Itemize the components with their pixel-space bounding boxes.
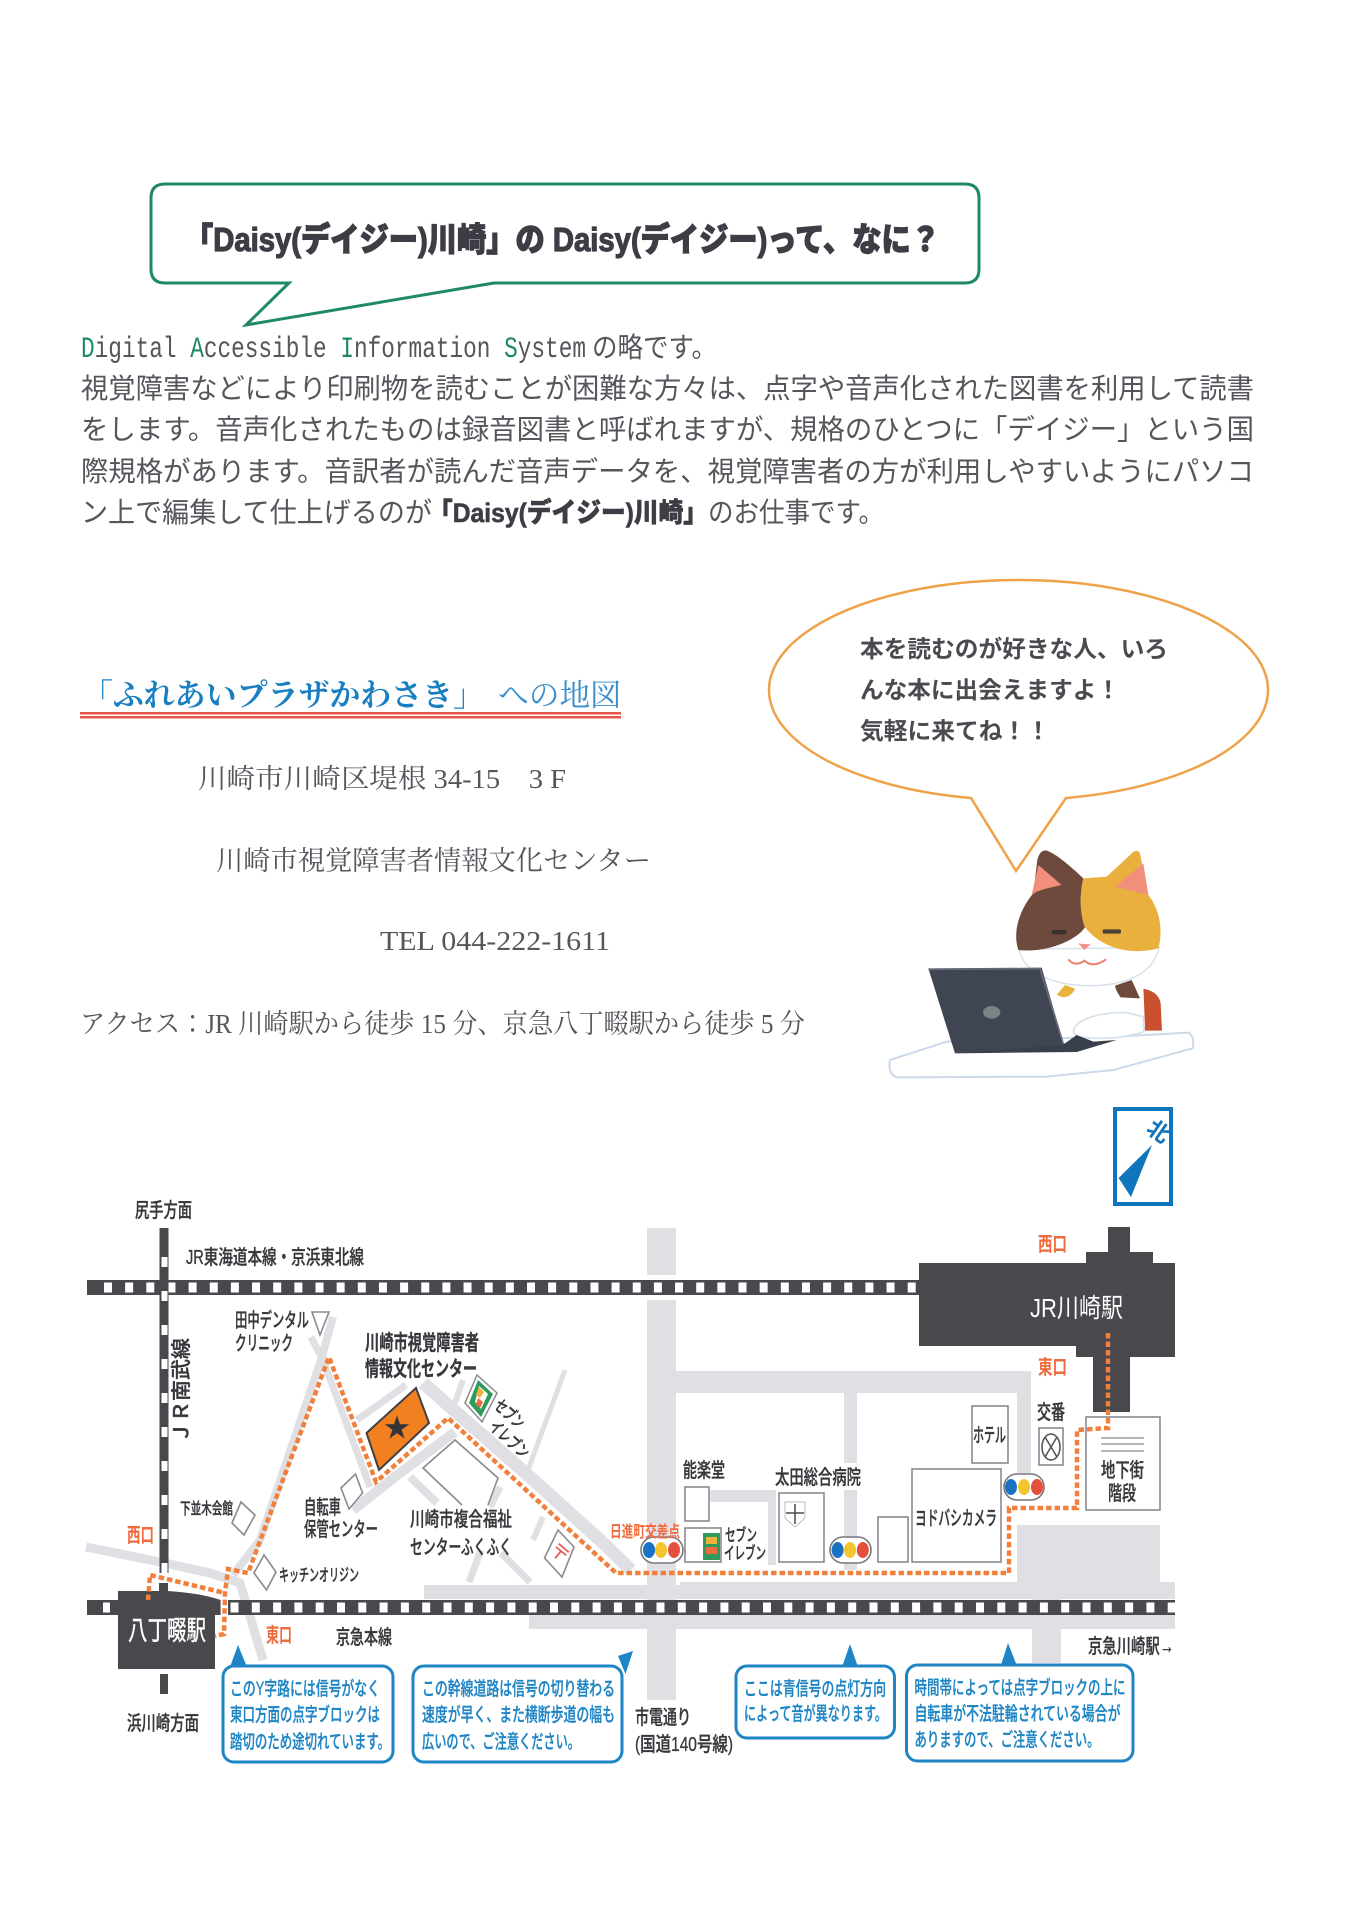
- map labels: [127, 1199, 1174, 1756]
- walking route: [148, 1333, 1108, 1636]
- icon: police box: [1042, 1434, 1060, 1460]
- callout: Y junction: 東口方面の点字ブロックは: [230, 1703, 380, 1726]
- map labels: 田中デンタル: [235, 1308, 309, 1332]
- icon: convenience store south: [703, 1533, 720, 1560]
- callout: bicycles: [906, 1643, 1133, 1761]
- callout: bicycles: 時間帯によっては点字ブロックの上に: [914, 1676, 1126, 1699]
- icon: hospital: [785, 1502, 805, 1527]
- map labels: イレブン: [724, 1543, 766, 1563]
- Hatchobori station: 八丁畷駅: [128, 1616, 206, 1646]
- map labels: ホテル: [973, 1425, 1006, 1447]
- map section heading: [80, 678, 621, 718]
- JR Kawasaki station: JR川崎駅: [1030, 1293, 1123, 1323]
- JR main line rail: [87, 1280, 919, 1295]
- map labels: 東口: [1038, 1356, 1067, 1379]
- heading speech bubble: 「Daisy(デイジー)川崎」の Daisy(デイジー)って、なに？: [184, 221, 940, 258]
- explanation text block: Digital Accessible Information System: [81, 333, 586, 367]
- map labels: 西口: [1038, 1234, 1067, 1256]
- Hatchobori station: [118, 1583, 221, 1669]
- map labels: セブン: [490, 1395, 529, 1433]
- map labels: 浜川崎方面: [127, 1712, 199, 1735]
- callout: Y junction: 踏切のため途切れています。: [230, 1731, 390, 1753]
- map labels: 京急川崎駅→: [1088, 1635, 1174, 1658]
- callout: signal sound: によって音が異なります。: [744, 1703, 887, 1725]
- JR Kawasaki station: [919, 1227, 1175, 1412]
- map labels: クリニック: [235, 1332, 293, 1355]
- access info: アクセス：JR 川崎駅から徒歩 15 分、京急八丁畷駅から徒歩 5 分: [80, 1009, 805, 1039]
- explanation text block: 視覚障害などにより印刷物を読むことが困難な方々は、点字や音声化された図書を利用して読書: [81, 373, 1254, 404]
- callout: Y junction: このY字路には信号がなく: [230, 1678, 380, 1700]
- explanation text block: のお仕事です。: [708, 497, 884, 528]
- map labels: 川崎市複合福祉: [410, 1508, 512, 1531]
- target building: ★: [384, 1413, 410, 1443]
- map labels: 西口: [127, 1525, 154, 1547]
- map labels: 日進町交差点: [610, 1522, 680, 1541]
- cat speech bubble: 気軽に来てね！！: [860, 718, 1050, 744]
- map section heading: への地図: [498, 678, 621, 713]
- explanation text block: 際規格があります。音訳者が読んだ音声データを、視覚障害者の方が利用しやすいようにパソコ: [81, 456, 1254, 487]
- map labels: 能楽堂: [683, 1459, 725, 1482]
- explanation text block: [81, 332, 1254, 528]
- cat speech bubble: んな本に出会えますよ！: [860, 677, 1120, 703]
- map labels: 市電通り: [635, 1706, 691, 1729]
- explanation text block: ン上で編集して仕上げるのが: [81, 497, 432, 528]
- callout: trunk road: この幹線道路は信号の切り替わる: [422, 1678, 615, 1700]
- map labels: キッチンオリジン: [279, 1566, 359, 1585]
- map labels: センターふくふく: [410, 1536, 512, 1559]
- map labels: ＪＲ南武線: [170, 1338, 193, 1443]
- callout: bicycles: ありますので、ご注意ください。: [914, 1729, 1100, 1751]
- post office: [544, 1530, 574, 1577]
- map labels: 太田総合病院: [775, 1466, 861, 1489]
- map labels: 地下街: [1101, 1459, 1144, 1482]
- callout: Y junction: [223, 1645, 393, 1762]
- explanation text block: 「Daisy(デイジー)川崎」: [428, 497, 708, 528]
- map labels: 保管センター: [304, 1518, 378, 1541]
- cat speech bubble: 本を読むのが好きな人、いろ: [860, 635, 1168, 662]
- traffic signal west: [641, 1537, 683, 1563]
- map labels: ヨドバシカメラ: [915, 1508, 997, 1530]
- address: 川崎市川崎区堤根 34-15 3 F: [198, 764, 566, 794]
- Keikyu line rail: [87, 1600, 1175, 1615]
- underground stairs lines: [1101, 1438, 1144, 1451]
- facility name: 川崎市視覚障害者情報文化センター: [216, 846, 651, 876]
- icon: cat with laptop: [889, 851, 1193, 1077]
- north indicator: [1115, 1109, 1174, 1204]
- icon: convenience store north: [465, 1375, 497, 1422]
- map labels: 尻手方面: [135, 1199, 192, 1222]
- north indicator: 北: [1142, 1115, 1174, 1148]
- cat speech bubble: [769, 580, 1268, 871]
- map section heading: 「ふれあいプラザかわさき」: [82, 678, 484, 713]
- callout: trunk road: 速度が早く、また横断歩道の幅も: [422, 1704, 615, 1726]
- traffic signal middle: [830, 1537, 871, 1563]
- callout: bicycles: 自転車が不法駐輪されている場合が: [914, 1703, 1120, 1725]
- callout: trunk road: 広いので、ご注意ください。: [422, 1731, 580, 1753]
- callout: trunk road: [413, 1651, 633, 1762]
- traffic signal east: [1004, 1474, 1044, 1500]
- route map: [86, 1199, 1175, 1762]
- map labels: セブン: [725, 1525, 757, 1545]
- map labels: JR東海道本線・京浜東北線: [186, 1246, 364, 1269]
- explanation text block: の略です。: [592, 332, 717, 363]
- heading speech bubble: [151, 184, 979, 325]
- map labels: 自転車: [304, 1496, 341, 1519]
- map labels: 下並木会館: [180, 1500, 233, 1518]
- map labels: 川崎市視覚障害者: [365, 1332, 479, 1355]
- callout: signal sound: ここは青信号の点灯方向: [744, 1678, 886, 1700]
- map labels: 京急本線: [336, 1626, 392, 1649]
- callout: signal sound: [736, 1644, 894, 1738]
- roads: [86, 1228, 1175, 1700]
- map labels: (国道140号線): [635, 1733, 733, 1756]
- map labels: 階段: [1108, 1482, 1136, 1505]
- buildings: [232, 1312, 1160, 1590]
- map labels: 交番: [1037, 1401, 1065, 1424]
- telephone: TEL 044-222-1611: [380, 926, 610, 956]
- JR Nambu line rail: [160, 1228, 168, 1694]
- map labels: イレブン: [485, 1416, 534, 1462]
- target building: [366, 1388, 429, 1470]
- map labels: 東口: [266, 1624, 292, 1647]
- map labels: 情報文化センター: [365, 1358, 477, 1381]
- explanation text block: をします。音声化されたものは録音図書と呼ばれますが、規格のひとつに「デイジー」という国: [81, 414, 1254, 445]
- post office: 〒: [544, 1539, 574, 1569]
